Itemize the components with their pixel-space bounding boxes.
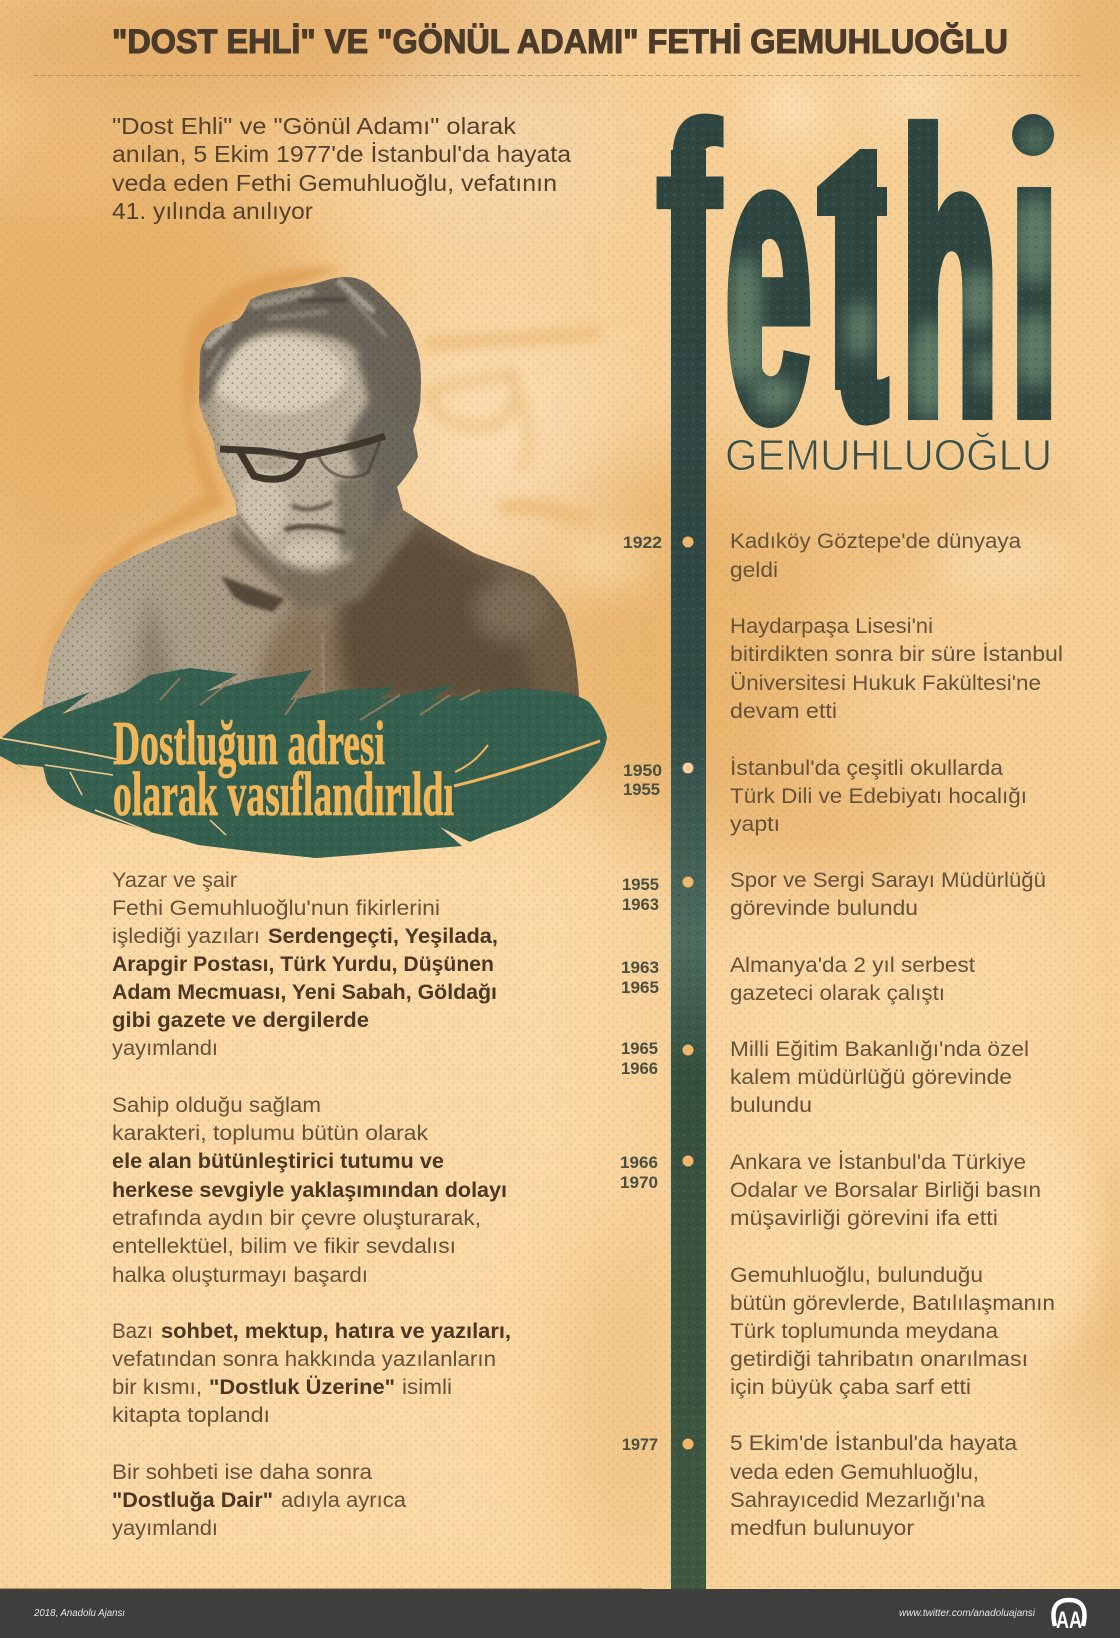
timeline descriptions: Üniversitesi Hukuk Fakültesi'ne <box>730 672 1041 695</box>
timeline descriptions: Sahrayıcedid Mezarlığı'na <box>730 1489 985 1512</box>
icon: Anadolu Agency logo <box>1053 1600 1085 1634</box>
timeline descriptions: Ankara ve İstanbul'da Türkiye <box>730 1151 1026 1174</box>
intro paragraph: veda eden Fethi Gemuhluoğlu, vefatının <box>112 170 557 196</box>
paragraph 2: ele alan bütünleştirici tutumu ve <box>112 1150 444 1173</box>
paragraph 3: Bazı <box>112 1320 153 1343</box>
timeline years: 1965 <box>621 978 659 997</box>
paragraph 4 <box>112 1461 406 1540</box>
feather banner with heading <box>0 668 607 858</box>
paragraph 3: sohbet, mektup, hatıra ve yazıları, <box>161 1320 511 1343</box>
timeline markers <box>682 536 694 1450</box>
timeline descriptions: Kadıköy Göztepe'de dünyaya <box>730 530 1021 553</box>
glasses <box>220 436 385 479</box>
timeline descriptions: Türk Dili ve Edebiyatı hocalığı <box>730 785 1027 808</box>
paragraph 2: entellektüel, bilim ve fikir sevdalısı <box>112 1235 456 1258</box>
paragraph 1: gibi gazete ve dergilerde <box>112 1009 369 1032</box>
timeline descriptions: bütün görevlerde, Batılılaşmanın <box>730 1292 1055 1315</box>
collar shadow <box>221 576 285 612</box>
face skin <box>205 328 425 610</box>
large name: fethi with timeline stem: h <box>901 59 998 492</box>
footer bar <box>0 1588 1120 1638</box>
paragraph 3: "Dostluk Üzerine" <box>209 1376 395 1399</box>
timeline years: 1966 <box>620 1153 658 1172</box>
timeline bar <box>671 150 706 1590</box>
timeline descriptions: Haydarpaşa Lisesi'ni <box>730 615 933 638</box>
timeline years: 1970 <box>620 1173 658 1192</box>
icon: Anadolu Agency logo: AA <box>1056 1607 1082 1634</box>
timeline years: 1955 <box>622 875 659 894</box>
large name: fethi with timeline stem: f <box>654 58 724 415</box>
footer link: www.twitter.com/anadoluajansi <box>899 1607 1036 1619</box>
timeline descriptions: İstanbul'da çeşitli okullarda <box>730 757 1003 780</box>
paragraph 3 <box>112 1320 511 1427</box>
timeline descriptions: gazeteci olarak çalıştı <box>730 982 945 1005</box>
timeline years: 1965 <box>621 1039 658 1058</box>
timeline descriptions: için büyük çaba sarf etti <box>730 1376 971 1399</box>
paragraph 1: Serdengeçti, Yeşilada, <box>268 925 498 948</box>
paragraph 4: Bir sohbeti ise daha sonra <box>112 1461 372 1484</box>
large name: fethi with timeline stem: i <box>1000 20 1069 514</box>
timeline descriptions: Türk toplumunda meydana <box>730 1320 998 1343</box>
timeline descriptions: Milli Eğitim Bakanlığı'nda özel <box>730 1038 1029 1061</box>
paragraph 1: Fethi Gemuhluoğlu'nun fikirlerini <box>112 897 440 920</box>
paragraph 3: isimli <box>402 1376 452 1399</box>
paragraph 2: Sahip olduğu sağlam <box>112 1094 321 1117</box>
hair <box>196 272 425 430</box>
timeline descriptions: müşavirliği görevini ifa etti <box>730 1207 998 1230</box>
large name: fethi with timeline stem: t <box>826 57 890 503</box>
timeline descriptions: devam etti <box>730 700 837 723</box>
intro paragraph: anılan, 5 Ekim 1977'de İstanbul'da hayata <box>112 141 571 167</box>
paragraph 3: vefatından sonra hakkında yazılanların <box>112 1348 496 1371</box>
paragraph 2: herkese sevgiyle yaklaşımından dolayı <box>112 1179 507 1202</box>
feather banner with heading: olarak vasıflandırıldı <box>113 761 454 829</box>
large name: fethi with timeline stem <box>656 114 1054 1589</box>
shirt folds <box>50 525 545 700</box>
background: ghosted enlarged portrait <box>425 332 600 520</box>
intro paragraph <box>112 113 571 224</box>
paragraph 4: adıyla ayrıca <box>281 1489 406 1512</box>
paragraph 2: karakteri, toplumu bütün olarak <box>112 1122 429 1145</box>
intro paragraph: 41. yılında anılıyor <box>112 198 313 224</box>
footer credit: 2018, Anadolu Ajansı <box>33 1607 125 1619</box>
timeline descriptions: kalem müdürlüğü görevinde <box>730 1066 1012 1089</box>
timeline years: 1963 <box>621 958 659 977</box>
paragraph 1: Arapgir Postası, Türk Yurdu, Düşünen <box>112 953 494 976</box>
timeline descriptions: getirdiği tahribatın onarılması <box>730 1348 1028 1371</box>
timeline descriptions: bulundu <box>730 1094 812 1117</box>
paragraph 2 <box>112 1094 507 1287</box>
timeline years: 1950 <box>623 761 662 780</box>
timeline descriptions: Odalar ve Borsalar Birliği basın <box>730 1179 1041 1202</box>
timeline descriptions: bitirdikten sonra bir süre İstanbul <box>730 643 1063 666</box>
paragraph 1: yayımlandı <box>112 1037 218 1060</box>
timeline descriptions: 5 Ekim'de İstanbul'da hayata <box>730 1432 1017 1455</box>
paragraph 2: halka oluşturmayı başardı <box>112 1264 368 1287</box>
paragraph 3: kitapta toplandı <box>112 1404 270 1427</box>
nose and mouth <box>292 502 332 509</box>
paragraph 2: etrafında aydın bir çevre oluşturarak, <box>112 1207 481 1230</box>
timeline years: 1963 <box>622 895 659 914</box>
timeline descriptions <box>730 530 1063 1540</box>
surname: Gemuhluoğlu: GEMUHLUOĞLU <box>725 431 1052 480</box>
timeline descriptions: geldi <box>730 559 778 582</box>
intro paragraph: "Dost Ehli" ve "Gönül Adamı" olarak <box>112 113 517 139</box>
paragraph 1: Adam Mecmuası, Yeni Sabah, Göldağı <box>112 981 497 1004</box>
left column body text <box>112 869 511 1540</box>
feather heading: Dostluğun adresi <box>113 710 385 778</box>
paragraph 3: bir kısmı, <box>112 1376 202 1399</box>
timeline descriptions: Almanya'da 2 yıl serbest <box>730 954 975 977</box>
timeline years: 1955 <box>623 780 660 799</box>
feather quill and barb slits <box>0 738 600 835</box>
header title: "DOST EHLİ" VE "GÖNÜL ADAMI" FETHİ GEMUHLUOĞLU <box>112 23 1008 61</box>
timeline years: 1966 <box>621 1059 658 1078</box>
portrait photo of Fethi Gemuhluoğlu <box>30 270 590 710</box>
mottled watercolor inside letters <box>650 110 1060 1590</box>
paragraph 1: Yazar ve şair <box>112 869 237 892</box>
paragraph 4: "Dostluğa Dair" <box>112 1489 273 1512</box>
paragraph 1 <box>112 869 498 1060</box>
timeline descriptions: Gemuhluoğlu, bulunduğu <box>730 1264 983 1287</box>
timeline descriptions: medfun bulunuyor <box>730 1517 914 1540</box>
timeline descriptions: Spor ve Sergi Sarayı Müdürlüğü <box>730 869 1046 892</box>
paragraph 1: işlediği yazıları <box>112 925 260 948</box>
paragraph 4: yayımlandı <box>112 1517 218 1540</box>
timeline years: 1977 <box>622 1435 658 1454</box>
timeline descriptions: görevinde bulundu <box>730 897 918 920</box>
portrait halo shadow <box>35 267 345 700</box>
timeline years: 1922 <box>623 533 662 552</box>
large name: fethi with timeline stem: e <box>724 45 813 504</box>
timeline years <box>620 533 662 1454</box>
timeline descriptions: yaptı <box>730 813 780 836</box>
timeline descriptions: veda eden Gemuhluoğlu, <box>730 1461 979 1484</box>
